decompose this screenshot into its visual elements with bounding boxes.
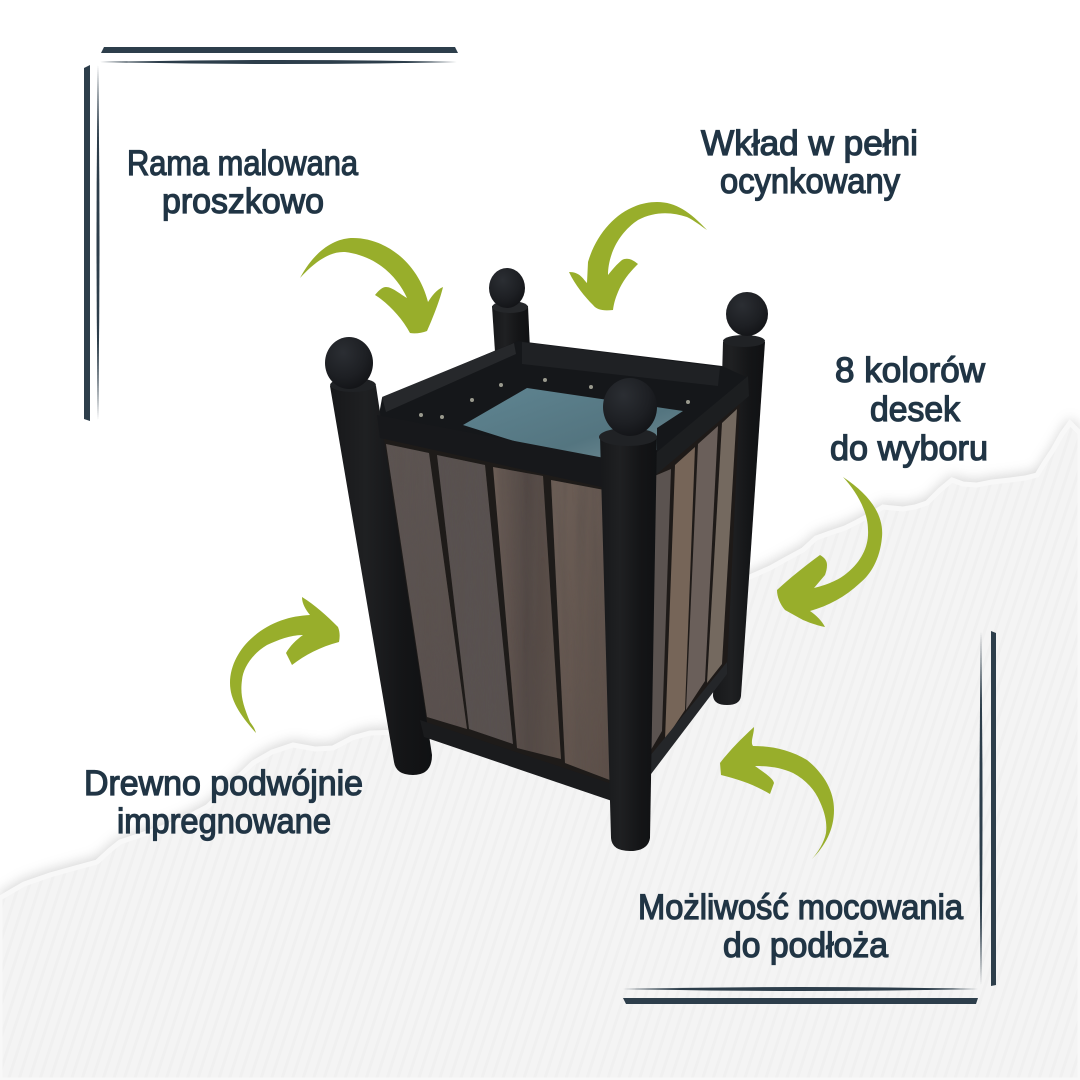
arrow 3: [777, 477, 882, 627]
back-right post: [713, 292, 768, 705]
label: impregnated wood: [84, 764, 363, 841]
label: board colours: desek: [870, 390, 960, 429]
label: powder-coated frame: [127, 144, 358, 221]
label: ground mounting: Możliwość mocowania: [638, 888, 963, 927]
frame: bottom-right corner: [623, 631, 996, 1004]
label: board colours: [830, 351, 988, 468]
arrow 2: [569, 202, 707, 310]
back rail: [522, 342, 720, 386]
label: powder-coated frame: Rama malowana: [127, 144, 358, 183]
label: ground mounting: do podłoża: [723, 926, 889, 965]
label: powder-coated frame: proszkowo: [162, 182, 324, 221]
boards behind gaps: [382, 436, 625, 800]
screws: [419, 378, 690, 419]
front-left post: [325, 337, 432, 775]
label: board colours: 8 kolorów: [835, 351, 986, 390]
label: galvanized insert: ocynkowany: [720, 162, 900, 201]
left rail: [382, 343, 516, 412]
label: board colours: do wyboru: [830, 429, 988, 468]
planter: [325, 268, 768, 851]
arrow 4: [230, 597, 340, 733]
background: torn grey paper: [0, 418, 1080, 1080]
label: ground mounting: [638, 888, 963, 965]
label: galvanized insert: Wkład w pełni: [701, 124, 918, 163]
bottom right rail: [645, 662, 727, 782]
inner frame: [378, 341, 748, 475]
arrow 1: [300, 238, 443, 333]
back-centre post: [489, 268, 530, 352]
label: impregnated wood: impregnowane: [117, 802, 331, 841]
front corner post: [599, 378, 657, 851]
label: impregnated wood: Drewno podwójnie: [84, 764, 363, 803]
front top rail: [377, 415, 615, 490]
frame: top-left corner: [84, 47, 458, 421]
arrow 5: [720, 727, 834, 859]
front wood boards: [386, 444, 615, 782]
right top rail: [645, 376, 749, 484]
label: galvanized insert: [701, 124, 918, 201]
right wood boards: [645, 409, 737, 760]
bottom front rail: [420, 720, 615, 802]
galvanized liner: [463, 388, 683, 468]
